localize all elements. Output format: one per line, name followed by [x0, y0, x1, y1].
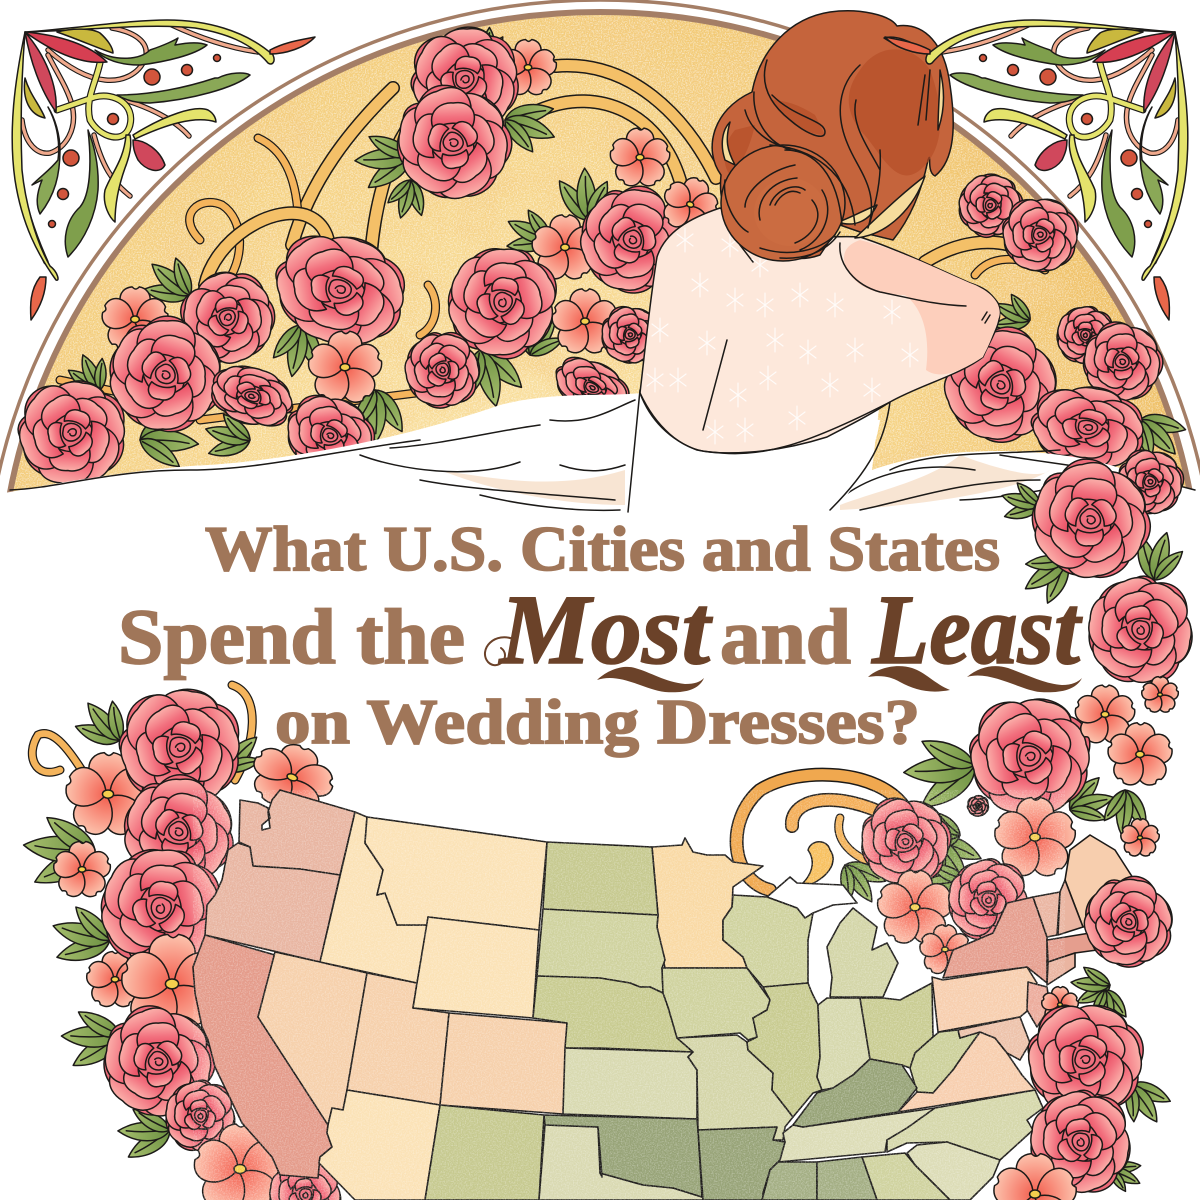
Atlantic peach states: [898, 835, 1133, 1112]
green tier states: [425, 842, 1043, 1200]
lower right roses over the map: [990, 861, 1186, 1200]
corner ornament right: [885, 20, 1188, 320]
title: [118, 513, 1083, 757]
title: and: [720, 593, 851, 680]
white dress flowing across the arch base: [0, 392, 1200, 530]
map paper texture: [193, 790, 1065, 1200]
upper right floral group: [737, 677, 1180, 977]
yellow tier states: [319, 812, 763, 1200]
red hair updo: [712, 11, 953, 261]
arch panel with golden background: [0, 0, 1200, 492]
northeast salmon states: [943, 880, 1097, 1060]
upper Michigan peninsula: [767, 877, 857, 918]
west coast states: [205, 790, 355, 962]
title: What U.S. Cities and States: [205, 513, 1000, 584]
title: Most: [498, 574, 713, 685]
left floral column: [23, 678, 348, 1200]
golden scrollwork: [60, 66, 1045, 420]
darkest green states: [544, 1059, 917, 1200]
title: Least: [871, 574, 1083, 685]
map of the United States: [193, 790, 1133, 1200]
title: on Wedding Dresses?: [275, 687, 920, 757]
title: Spend the: [118, 593, 465, 680]
corner ornament left: [12, 20, 315, 320]
roses and flowers behind the bride: [5, 26, 1197, 494]
mountain states: [258, 952, 567, 1125]
bride back and dress: [628, 208, 1000, 520]
roses along the right margin: [997, 433, 1200, 697]
California: [193, 935, 332, 1178]
